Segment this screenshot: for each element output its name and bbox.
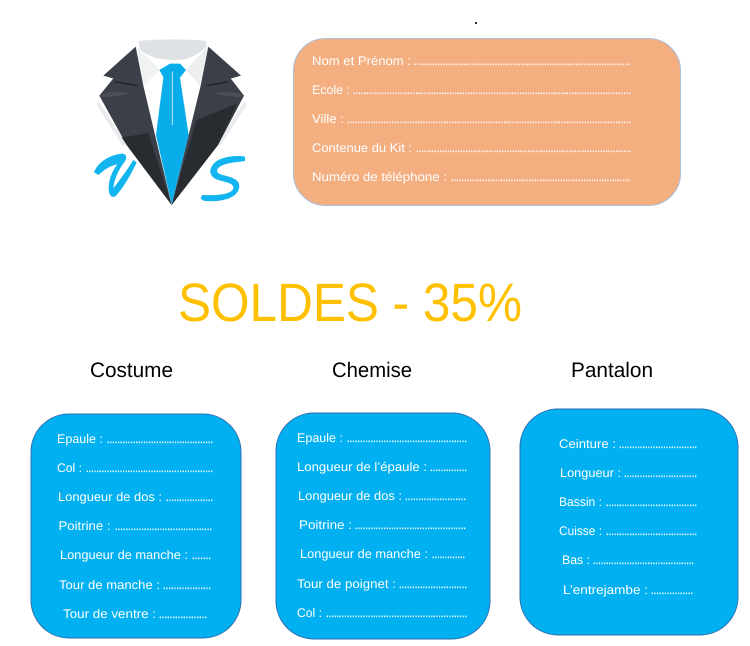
field: L’entrejambe: L’entrejambe : (563, 583, 648, 597)
field: Tour de manche: .................. (163, 578, 211, 592)
field: Poitrine: Poitrine : (58, 519, 110, 533)
field: Cuisse: Cuisse : (559, 524, 602, 538)
field: Tour de poignet: Tour de poignet : (297, 577, 396, 591)
field: Col: Col : (297, 606, 322, 620)
field: Bassin: ................................... (606, 495, 697, 509)
field: Col: ...................................................... (326, 606, 467, 620)
field: Ville: ............................................................................................................. (347, 112, 631, 126)
field: Ecole: ........................................................................................................... (353, 83, 631, 97)
field: Longueur de manche: Longueur de manche : (300, 547, 428, 561)
field: Col: Col : (57, 461, 82, 475)
field: Ecole (312, 83, 631, 97)
field: Poitrine (299, 518, 466, 532)
field: Ceinture: .............................. (619, 437, 697, 451)
field: Bassin (559, 495, 697, 509)
field: Col (297, 606, 467, 620)
field: Tour de ventre: Tour de ventre : (63, 607, 156, 621)
field: Longueur: ............................ (624, 466, 697, 480)
field: Numéro de téléphone: Numéro de téléphone : (312, 170, 447, 184)
field: Longueur de dos (298, 489, 466, 503)
field: Longueur de dos: Longueur de dos : (298, 489, 402, 503)
field: Longueur: Longueur : (560, 466, 621, 480)
field: Nom et Prénom (312, 54, 630, 68)
field: Tour de poignet (297, 577, 467, 591)
field: Longueur de dos: Longueur de dos : (58, 490, 162, 504)
field: Tour de ventre (63, 607, 207, 621)
field: Longueur de dos: ....................... (405, 489, 466, 503)
field: Cuisse (559, 524, 697, 538)
field: Tour de manche (59, 578, 211, 592)
field: Tour de poignet: .......................... (399, 577, 467, 591)
panel: contact details (294, 38, 680, 206)
heading: Chemise: Chemise (332, 359, 412, 382)
field: Ceinture (559, 437, 697, 451)
field: Longueur de manche: ............. (432, 547, 465, 561)
field: Longueur de manche: Longueur de manche : (60, 548, 188, 562)
title: SOLDES - 35% (178, 273, 522, 333)
field: Contenue du Kit: Contenue du Kit : (312, 141, 412, 155)
field: Epaule: Epaule : (297, 431, 343, 445)
field: Ecole: Ecole : (312, 83, 350, 97)
field: Poitrine: Poitrine : (299, 518, 352, 532)
field: Epaule: Epaule : (57, 432, 103, 446)
field: Numéro de téléphone (312, 170, 630, 184)
field: L’entrejambe: ................ (651, 583, 693, 597)
field: Nom et Prénom: Nom et Prénom : (312, 54, 411, 68)
field: Poitrine: ..................................... (115, 519, 212, 533)
field: Longueur de dos (58, 490, 213, 504)
letter S (201, 156, 245, 201)
field: Poitrine (58, 519, 212, 533)
field: L’entrejambe (563, 583, 693, 597)
field: Cuisse: ................................... (606, 524, 697, 538)
field: Ceinture: Ceinture : (559, 437, 616, 451)
heading: Costume: Costume (90, 359, 173, 382)
panel: chemise measurements (276, 413, 490, 639)
field: Bas: Bas : (562, 553, 590, 567)
field: Bas (562, 553, 694, 567)
field: Nom et Prénom: ................................................................................... (414, 54, 630, 68)
field: Tour de ventre: .................. (159, 607, 207, 621)
field: Numéro de téléphone: ..................................................................... (451, 170, 630, 184)
heading: Pantalon: Pantalon (571, 359, 653, 382)
field: Col (57, 461, 213, 475)
field: Bassin: Bassin : (559, 495, 602, 509)
field: Tour de manche: Tour de manche : (59, 578, 160, 592)
icon: suit and tie logo with VS initials (94, 39, 247, 205)
field: Longueur de l’épaule: .............. (430, 460, 467, 474)
panel: pantalon measurements (520, 409, 738, 635)
field: Bas: ....................................... (593, 553, 694, 567)
letter V (94, 154, 137, 197)
field: Contenue du Kit: ................................................................................... (416, 141, 631, 155)
field: Epaule: ......................................... (107, 432, 213, 446)
field: Longueur de l’épaule: Longueur de l’épaule : (297, 460, 427, 474)
field: Col: ................................................. (86, 461, 213, 475)
field: Ville: Ville : (312, 112, 344, 126)
field: Ville (312, 112, 631, 126)
field: Longueur (560, 466, 697, 480)
field: Epaule (57, 432, 213, 446)
field: Epaule (297, 431, 467, 445)
field: Contenue du Kit (312, 141, 631, 155)
panel: costume measurements (31, 414, 241, 638)
field: Epaule: .............................................. (347, 431, 467, 445)
field: Longueur de manche: ....... (192, 548, 211, 562)
field: Poitrine: ........................................... (355, 518, 466, 532)
field: Longueur de dos: .................. (166, 490, 213, 504)
